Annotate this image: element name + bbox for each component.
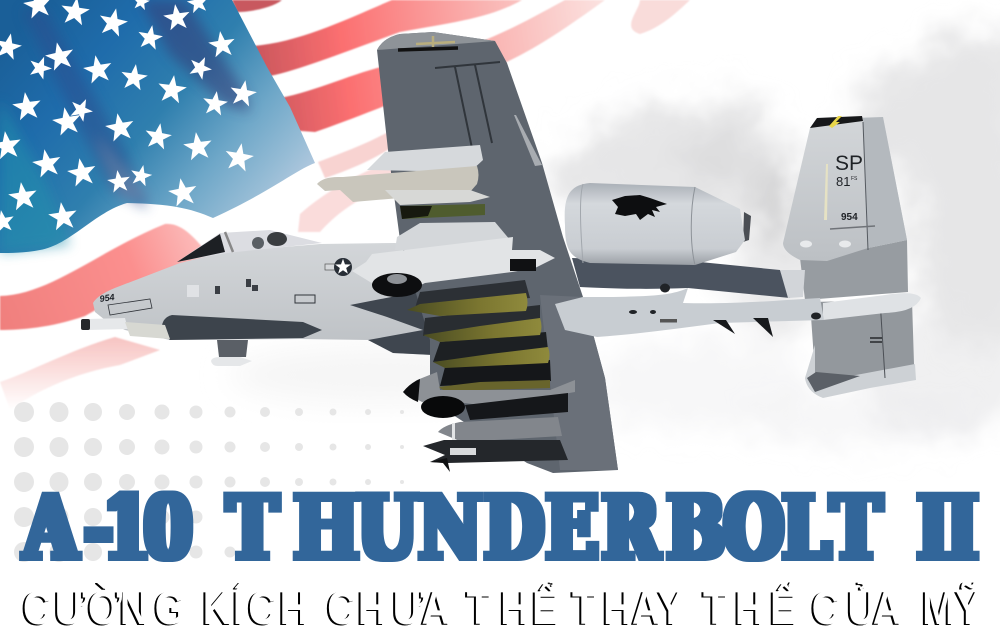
wing bbox=[377, 32, 618, 473]
engine nacelle bbox=[565, 183, 751, 265]
tail boom detail bbox=[629, 284, 821, 322]
upper wing pylon and pod bbox=[317, 145, 490, 219]
tail: upper stabilizer section bbox=[800, 240, 908, 300]
nose markings bbox=[99, 279, 315, 315]
flag stars bbox=[0, 0, 259, 234]
front fuselage bbox=[93, 230, 440, 355]
bomb 2 bbox=[423, 318, 542, 342]
gun barrel and nose gear bbox=[81, 318, 170, 339]
cockpit canopy bbox=[177, 230, 322, 262]
tail: vertical stabilizer: FS bbox=[851, 176, 858, 182]
tail: vertical stabilizer bbox=[783, 116, 907, 261]
inboard pylon and wheel pod bbox=[352, 222, 555, 297]
bombs group bbox=[407, 280, 551, 391]
tail fins under boom bbox=[713, 318, 773, 337]
missiles bbox=[423, 417, 568, 472]
tail: lower horizontal stabilizer bbox=[805, 300, 916, 398]
tail pod bbox=[823, 293, 921, 320]
tail: vertical stabilizer: 954 bbox=[841, 212, 858, 223]
halftone dots bbox=[14, 402, 404, 562]
bomb 4 bbox=[438, 380, 550, 391]
flag: blue canton bbox=[0, 0, 315, 253]
engine pylon bbox=[572, 258, 790, 298]
title: A-10 THUNDERBOLT II bbox=[23, 476, 978, 580]
tail: vertical stabilizer: 81 bbox=[836, 174, 850, 189]
flag: red and white stripes bbox=[0, 0, 690, 410]
rear fuselage boom bbox=[555, 288, 824, 337]
tail: vertical stabilizer: SP bbox=[835, 152, 863, 175]
bomb 3 bbox=[433, 347, 550, 368]
underwing store on nose bbox=[211, 340, 252, 366]
bomb 1 bbox=[407, 293, 528, 316]
fuselage shadow bbox=[162, 315, 322, 340]
lower wheel pod bbox=[403, 372, 575, 420]
nose markings: 954 bbox=[99, 292, 115, 304]
clouds background bbox=[230, 30, 1000, 448]
aircraft: A-10 Thunderbolt II bbox=[81, 32, 921, 473]
national insignia roundel bbox=[325, 258, 352, 276]
